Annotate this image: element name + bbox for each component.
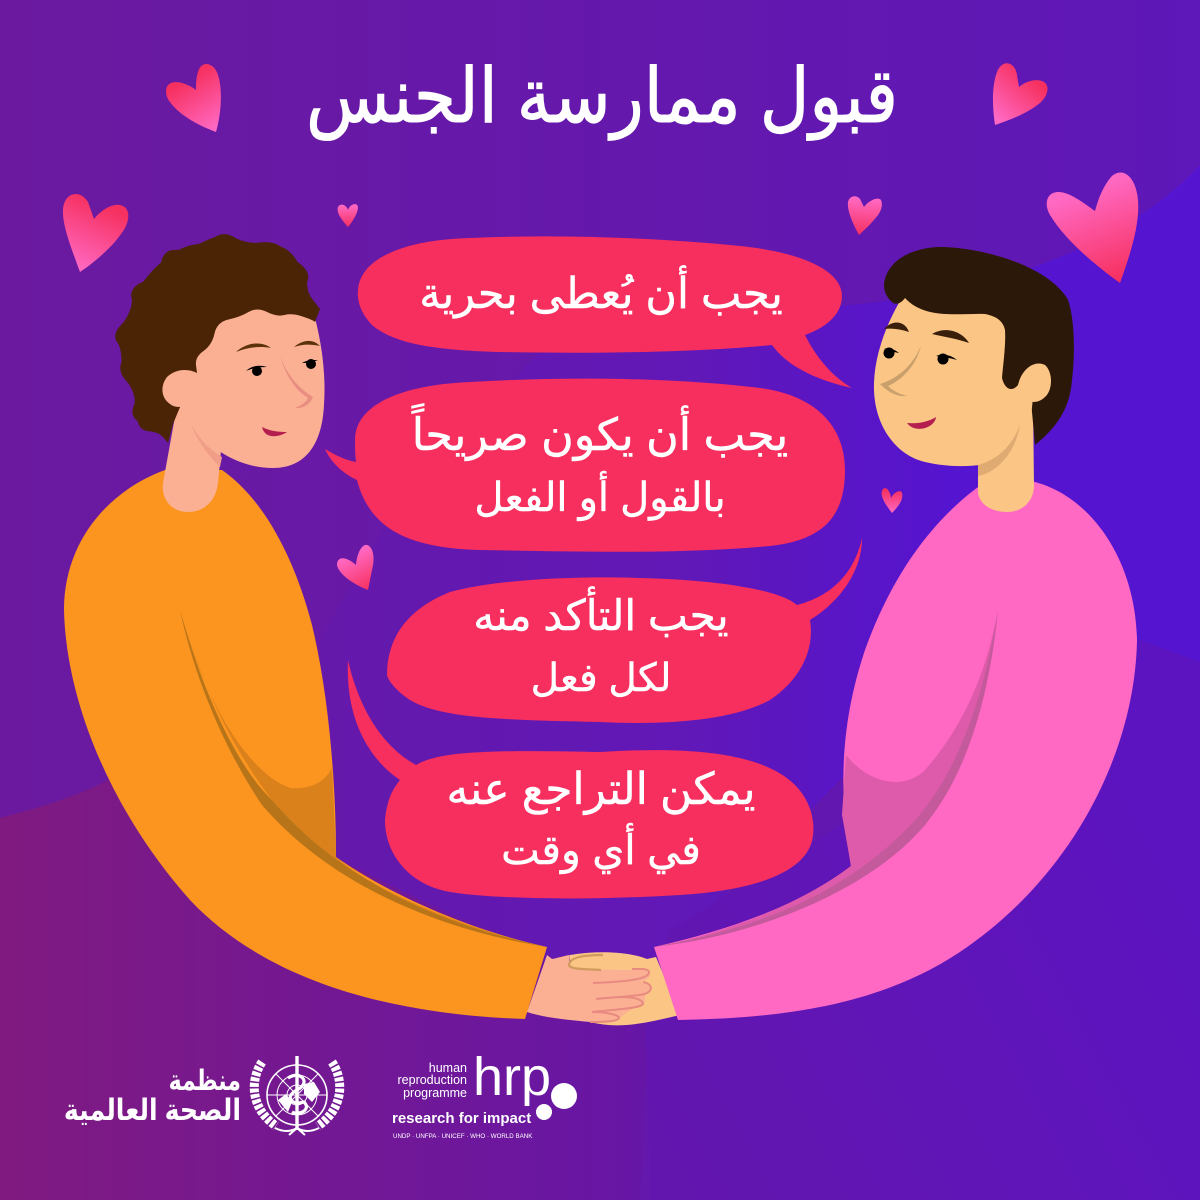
bubble text: يجب أن يُعطى بحرية xyxy=(419,265,783,319)
eyebrows xyxy=(236,341,320,352)
icon: heart top left xyxy=(166,64,221,132)
finger lines xyxy=(590,969,651,1022)
nose xyxy=(880,345,921,396)
speech bubble 1 xyxy=(358,236,852,388)
speech bubble 3 xyxy=(387,538,862,723)
sweater fold shadow xyxy=(180,610,547,947)
icon: small heart right xyxy=(848,196,882,235)
eyebrows xyxy=(884,323,969,343)
logo: WHO wordmark xyxy=(64,1065,241,1126)
logo: hrp: research for impact xyxy=(392,1110,531,1127)
logo: hrp: programme xyxy=(403,1086,467,1100)
face xyxy=(178,305,325,468)
ear xyxy=(1018,364,1051,402)
logo: WHO emblem xyxy=(254,1056,340,1135)
neck shadow xyxy=(190,422,222,467)
orange sweater xyxy=(64,470,547,1019)
bubble text: لكل فعل xyxy=(531,657,671,700)
neck shadow xyxy=(978,425,1020,476)
hair back xyxy=(884,247,1074,445)
icon: heart top right xyxy=(993,63,1047,125)
icon: heart centre left xyxy=(337,545,374,590)
logo: hrp: human xyxy=(429,1061,467,1075)
title: قبول ممارسة الجنس xyxy=(306,55,898,141)
bubble text xyxy=(446,765,756,875)
icon: big heart right xyxy=(1047,173,1138,283)
neck xyxy=(978,400,1034,512)
eyes xyxy=(246,359,318,376)
logo: hrp: UNDP · UNFPA · UNICEF · WHO · WORLD BANK xyxy=(393,1133,533,1140)
sweater fold shadow xyxy=(654,610,998,947)
thumb line xyxy=(569,955,603,970)
bubble text: يجب أن يكون صريحاً xyxy=(411,403,788,461)
pink sweater xyxy=(654,479,1137,1020)
logo: hrp: hrp xyxy=(473,1047,551,1107)
person left xyxy=(64,234,547,1019)
right hand xyxy=(570,952,680,1025)
logo: WHO wordmark: منظمة xyxy=(169,1065,241,1097)
bubble text: يمكن التراجع عنه xyxy=(446,765,756,815)
logo: hrp: reproduction xyxy=(398,1073,467,1087)
eyes xyxy=(884,348,957,364)
sleeve fold line xyxy=(180,610,547,947)
mouth xyxy=(907,417,936,429)
nose xyxy=(280,355,313,408)
bubble text xyxy=(411,403,788,521)
face xyxy=(874,296,1033,466)
logo: hrp xyxy=(392,1047,577,1140)
neck xyxy=(163,400,222,512)
person right xyxy=(654,247,1137,1020)
bubble text: بالقول أو الفعل xyxy=(474,471,726,521)
icon: tiny heart near face xyxy=(882,488,902,513)
hair front xyxy=(884,247,1072,389)
mouth xyxy=(262,427,287,436)
hair xyxy=(115,234,320,443)
hands xyxy=(527,952,680,1025)
bubble text: في أي وقت xyxy=(501,823,701,875)
sleeve fold line xyxy=(654,610,998,947)
icon: heart left of head xyxy=(63,194,128,272)
left hand xyxy=(527,955,650,1022)
speech bubble 2 xyxy=(325,379,845,552)
ear xyxy=(162,370,200,407)
speech bubble 4 xyxy=(348,660,813,898)
icon: small heart xyxy=(338,204,358,227)
bubble text xyxy=(473,586,729,700)
logo: WHO wordmark: الصحة العالمية xyxy=(64,1093,241,1126)
bubble text: يجب التأكد منه xyxy=(473,586,729,639)
